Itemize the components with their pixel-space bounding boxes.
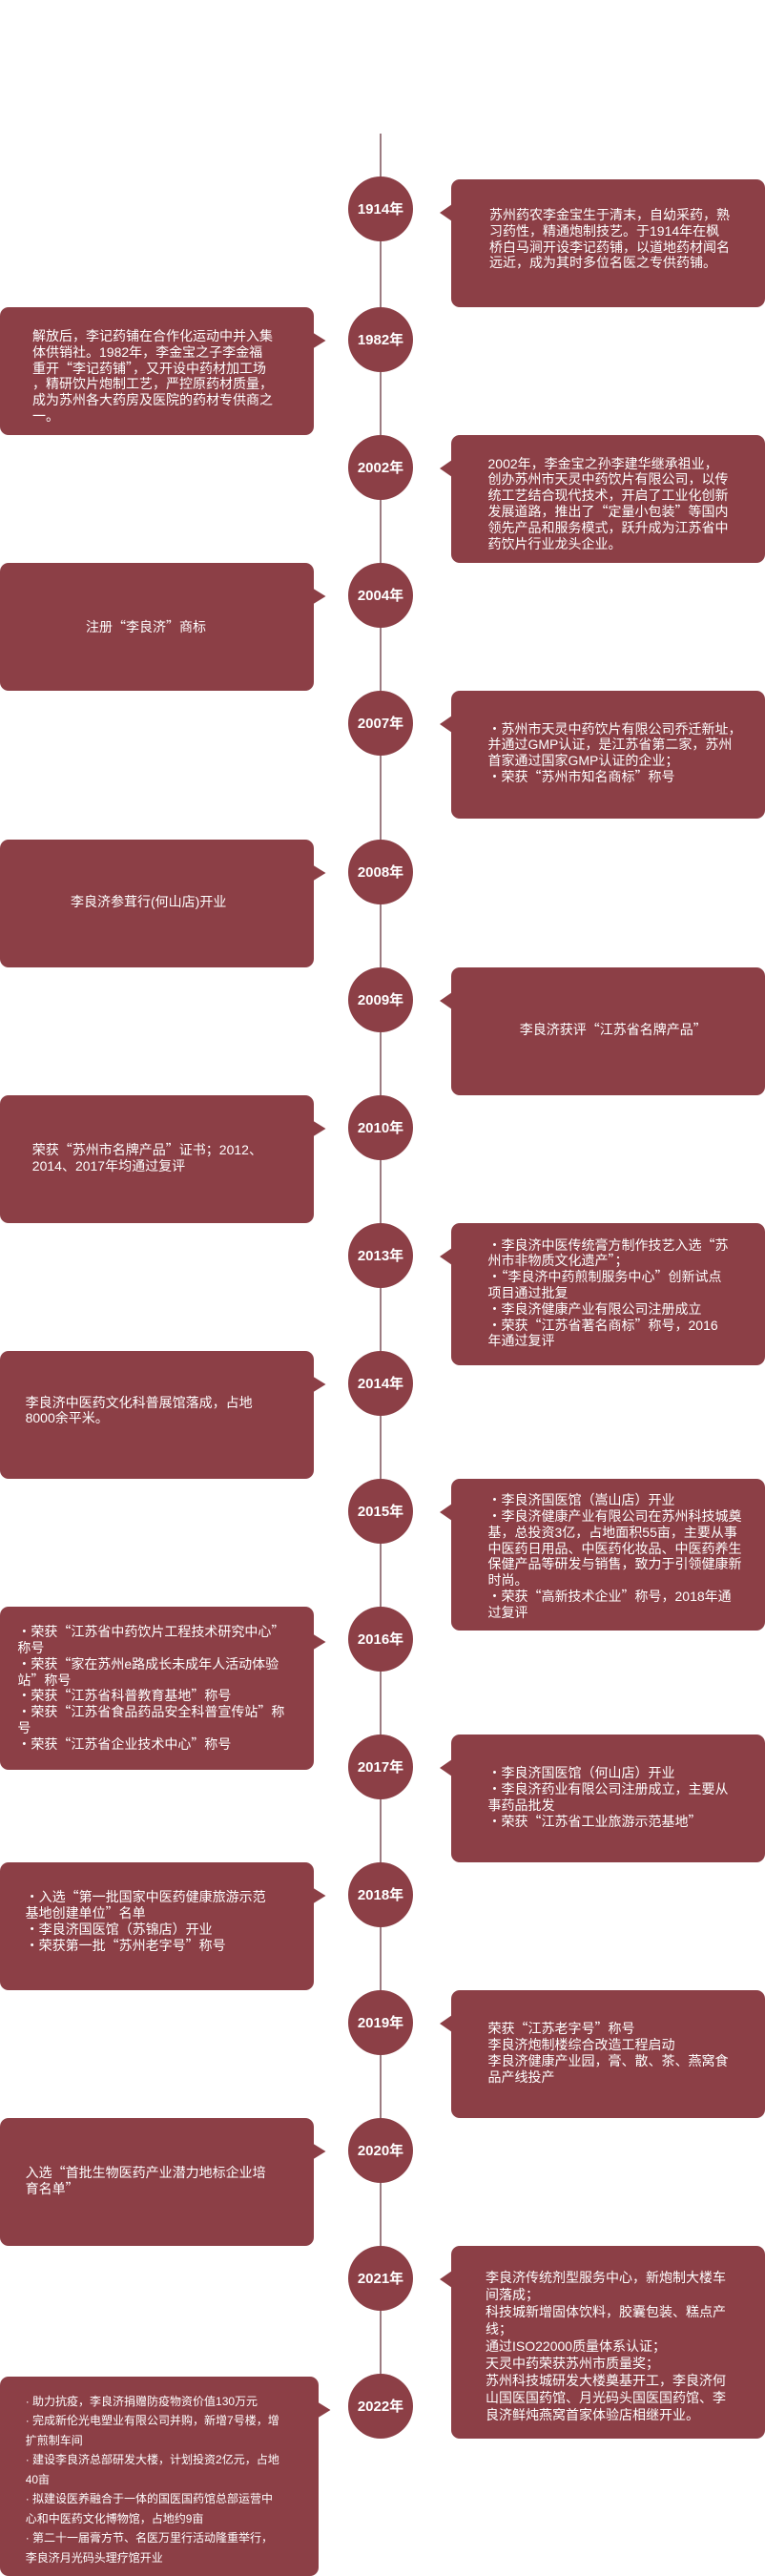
text: 1914: 桥白马涧开设李记药铺，以道地药材闻名	[489, 239, 730, 255]
text: 2022: 李良济月光码头理疗馆开业	[26, 2551, 163, 2565]
text: 2016: ・荣获“江苏省食品药品安全科普宣传站”称	[17, 1702, 284, 1721]
year marker: 2009	[348, 967, 413, 1032]
text: 2016	[17, 1622, 284, 1754]
text: 2017	[488, 1765, 729, 1831]
panel: 2019	[451, 1990, 765, 2118]
text: 2013: 项目通过批复	[488, 1285, 569, 1300]
text: 2021: 间落成；	[486, 2287, 539, 2302]
text: 2020: 育名单”	[26, 2179, 79, 2198]
text: 2002	[488, 456, 729, 551]
year marker: 2010: 2010年	[358, 1120, 403, 1136]
year marker: 1914	[348, 177, 413, 241]
text: 2021: 李良济传统剂型服务中心，新炮制大楼车	[486, 2270, 726, 2285]
panel: 2013	[451, 1223, 765, 1365]
panel: 1914	[451, 179, 765, 307]
text: 2021: 苏州科技城研发大楼奠基开工，李良济何	[486, 2373, 726, 2388]
text: 2010	[32, 1140, 262, 1174]
text: 2014: 8000余平米。	[26, 1410, 109, 1425]
year marker: 2020	[348, 2118, 413, 2183]
text: 2016: 称号	[17, 1640, 44, 1655]
text: 2018	[26, 1887, 266, 1955]
year marker: 2015	[348, 1479, 413, 1544]
text: 2007	[488, 721, 742, 786]
panel: 2014	[0, 1351, 313, 1479]
text: 2022: 40亩	[26, 2473, 50, 2486]
year marker: 2018: 2018年	[358, 1887, 403, 1903]
text: 2021: 山国医国药馆、月光码头国医国药馆、李	[486, 2390, 726, 2405]
text: 2017: ・李良济国医馆（何山店）开业	[488, 1765, 675, 1780]
text: 2014: 李良济中医药文化科普展馆落成，占地	[26, 1395, 253, 1410]
panel: 2015	[451, 1479, 765, 1631]
panel: 1982	[0, 307, 313, 435]
text: 1982: 解放后，李记药铺在合作化运动中并入集	[32, 328, 273, 343]
year marker: 2017: 2017年	[358, 1759, 403, 1776]
text: 2017: 事药品批发	[488, 1797, 555, 1813]
year marker: 2002: 2002年	[358, 460, 403, 476]
text: 2022: · 建设李良济总部研发大楼，计划投资2亿元，占地	[26, 2453, 279, 2466]
text: 2022: 扩煎制车间	[26, 2434, 83, 2447]
text: 2020: 入选“首批生物医药产业潜力地标企业培	[26, 2163, 266, 2182]
text: 2013: 州市非物质文化遗产”；	[488, 1251, 628, 1270]
text: 2015: 时尚。	[488, 1572, 528, 1588]
year marker: 2021: 2021年	[358, 2271, 403, 2287]
text: 1982: 一。	[32, 408, 59, 424]
text: 2019	[488, 2019, 729, 2085]
text: 2021: 通过ISO22000质量体系认证；	[486, 2338, 666, 2354]
text: 2010: 2014、2017年均通过复评	[32, 1158, 185, 1174]
text: 2016: 号	[17, 1720, 31, 1735]
year marker: 2009: 2009年	[358, 992, 403, 1008]
panel: 2007	[451, 691, 765, 819]
text: 2013: ・李良济健康产业有限公司注册成立	[488, 1301, 702, 1317]
text: 2016: ・荣获“江苏省科普教育基地”称号	[17, 1686, 231, 1705]
text: 1914: 苏州药农李金宝生于清末，自幼采药，熟	[489, 207, 730, 222]
text: 2013	[488, 1236, 729, 1348]
year marker: 2021	[348, 2246, 413, 2311]
text: 2018: ・李良济国医馆（苏锦店）开业	[26, 1922, 213, 1937]
text: 2008: 李良济参茸行(何山店)开业	[71, 894, 226, 909]
year marker: 1914: 1914年	[358, 201, 403, 218]
year marker: 2015: 2015年	[358, 1504, 403, 1520]
text: 2022	[26, 2395, 279, 2565]
panel: 2017	[451, 1735, 765, 1862]
timeline axis	[380, 134, 382, 2376]
text: 2017: ・李良济药业有限公司注册成立，主要从	[488, 1781, 729, 1797]
text: 2021: 良济鲜炖燕窝首家体验店相继开业。	[486, 2407, 699, 2422]
panel: 2002	[451, 435, 765, 563]
year marker: 2020: 2020年	[358, 2143, 403, 2159]
text: 2021: 天灵中药荣获苏州市质量奖；	[486, 2356, 659, 2371]
text: 1914: 远近，成为其时多位名医之专供药铺。	[489, 255, 716, 270]
text: 2016: ・荣获“家在苏州e路成长未成年人活动体验	[17, 1654, 279, 1673]
text: 2021: 线；	[486, 2321, 512, 2337]
text: 2018: 基地创建单位”名单	[26, 1903, 146, 1922]
year marker: 2017	[348, 1735, 413, 1799]
year marker: 2014: 2014年	[358, 1376, 403, 1392]
panel: 2020	[0, 2118, 313, 2246]
year marker: 2004: 2004年	[358, 588, 403, 604]
text: 2016: ・荣获“江苏省中药饮片工程技术研究中心”	[17, 1622, 284, 1641]
text: 2022: · 完成新伦光电塑业有限公司并购，新增7号楼，增	[26, 2414, 279, 2427]
text: 2007: 并通过GMP认证，是江苏省第二家，苏州	[488, 737, 732, 752]
text: 2009: 李良济获评“江苏省名牌产品”	[520, 1020, 707, 1039]
panel: 2004	[0, 563, 313, 691]
panel: 2010	[0, 1095, 313, 1223]
text: 1914: 习药性，精通炮制技艺。于1914年在枫	[489, 223, 719, 239]
year marker: 2016: 2016年	[358, 1631, 403, 1648]
text: 2007: ・荣获“苏州市知名商标”称号	[488, 767, 675, 786]
text: 2013: ・荣获“江苏省著名商标”称号，2016	[488, 1316, 718, 1335]
year marker: 2013	[348, 1223, 413, 1288]
year marker: 2018	[348, 1862, 413, 1927]
text: 1982: 成为苏州各大药房及医院的药材专供商之	[32, 392, 273, 407]
text: 2010: 荣获“苏州市名牌产品”证书；2012、	[32, 1140, 262, 1159]
panel: 2016	[0, 1607, 313, 1770]
year marker: 2002	[348, 435, 413, 500]
text: 2014	[26, 1395, 253, 1425]
text: 2015: ・荣获“高新技术企业”称号，2018年通	[488, 1587, 732, 1606]
text: 2019: 品产线投产	[488, 2069, 555, 2085]
panel: 2008	[0, 840, 313, 967]
year marker: 2019	[348, 1990, 413, 2055]
year marker: 1982	[348, 307, 413, 372]
panel: 2018	[0, 1862, 313, 1990]
text: 2018: ・荣获第一批“苏州老字号”称号	[26, 1936, 226, 1955]
text: 2015	[488, 1492, 742, 1620]
text: 2013: 年通过复评	[488, 1333, 555, 1348]
year marker: 2004	[348, 563, 413, 628]
text: 1982	[32, 328, 273, 424]
text: 2022: · 拟建设医养融合于一体的国医国药馆总部运营中	[26, 2492, 273, 2505]
text: 2015: 保健产品等研发与销售，致力于引领健康新	[488, 1556, 742, 1571]
text: 2015: 基，总投资3亿，占地面积55亩，主要从事	[488, 1525, 737, 1540]
text: 1914	[489, 207, 730, 270]
text: 2002: 统工艺结合现代技术，开启了工业化创新	[488, 488, 729, 503]
panel: 2009	[451, 967, 765, 1095]
text: 2013: ・李良济中医传统膏方制作技艺入选“苏	[488, 1236, 729, 1255]
text: 2007: 首家通过国家GMP认证的企业；	[488, 753, 678, 768]
year marker: 2022	[348, 2374, 413, 2439]
year marker: 2008: 2008年	[358, 864, 403, 881]
text: 2015: ・李良济健康产业有限公司在苏州科技城奠	[488, 1508, 742, 1524]
text: 2015: 中医药日用品、中医药化妆品、中医药养生	[488, 1541, 742, 1556]
year marker: 2007: 2007年	[358, 716, 403, 732]
text: 2018: ・入选“第一批国家中医药健康旅游示范	[26, 1887, 266, 1906]
year marker: 2008	[348, 840, 413, 904]
text: 2021	[486, 2270, 726, 2422]
year marker: 2016	[348, 1607, 413, 1672]
text: 2021: 科技城新增固体饮料，胶囊包装、糕点产	[486, 2304, 726, 2319]
text: 2004: 注册“李良济”商标	[86, 617, 206, 636]
text: 2016: ・荣获“江苏省企业技术中心”称号	[17, 1735, 231, 1754]
panel: 2022	[0, 2377, 319, 2576]
panel: 2021	[451, 2246, 765, 2439]
text: 2019: 李良济炮制楼综合改造工程启动	[488, 2037, 675, 2052]
text: 2022: · 助力抗疫，李良济捐赠防疫物资价值130万元	[26, 2395, 258, 2408]
text: 1982: 体供销社。1982年，李金宝之子李金福	[32, 344, 262, 360]
year marker: 2022: 2022年	[358, 2399, 403, 2415]
text: 2002: 2002年，李金宝之孙李建华继承祖业，	[488, 456, 718, 471]
text: 2019: 荣获“江苏老字号”称号	[488, 2019, 635, 2038]
year marker: 2019: 2019年	[358, 2015, 403, 2031]
text: 2002: 创办苏州市天灵中药饮片有限公司，以传	[488, 471, 729, 487]
text: 2017: ・荣获“江苏省工业旅游示范基地”	[488, 1812, 702, 1831]
text: 1982: 重开“李记药铺”，又开设中药材加工场	[32, 359, 266, 378]
text: 1982: ，精研饮片炮制工艺，严控原药材质量，	[32, 376, 273, 391]
text: 2022: 心和中医药文化博物馆，占地约9亩	[26, 2512, 203, 2525]
year marker: 2007	[348, 691, 413, 756]
text: 2015: 过复评	[488, 1605, 528, 1620]
year marker: 1982: 1982年	[358, 332, 403, 348]
text: 2020	[26, 2163, 266, 2198]
year marker: 2014	[348, 1351, 413, 1416]
text: 2022: · 第二十一届膏方节、名医万里行活动隆重举行，	[26, 2531, 273, 2545]
text: 2002: 发展道路，推出了“定量小包装”等国内	[488, 502, 729, 521]
text: 2002: 药饮片行业龙头企业。	[488, 536, 622, 551]
text: 2002: 领先产品和服务模式，跃升成为江苏省中	[488, 520, 729, 535]
text: 2019: 李良济健康产业园，膏、散、茶、燕窝食	[488, 2053, 729, 2068]
text: 2013: ・“李良济中药煎制服务中心”创新试点	[488, 1267, 721, 1286]
year marker: 2010	[348, 1095, 413, 1160]
text: 2007: ・苏州市天灵中药饮片有限公司乔迁新址，	[488, 721, 742, 737]
text: 2015: ・李良济国医馆（嵩山店）开业	[488, 1492, 675, 1507]
year marker: 2013: 2013年	[358, 1248, 403, 1264]
text: 2016: 站”称号	[17, 1671, 71, 1690]
